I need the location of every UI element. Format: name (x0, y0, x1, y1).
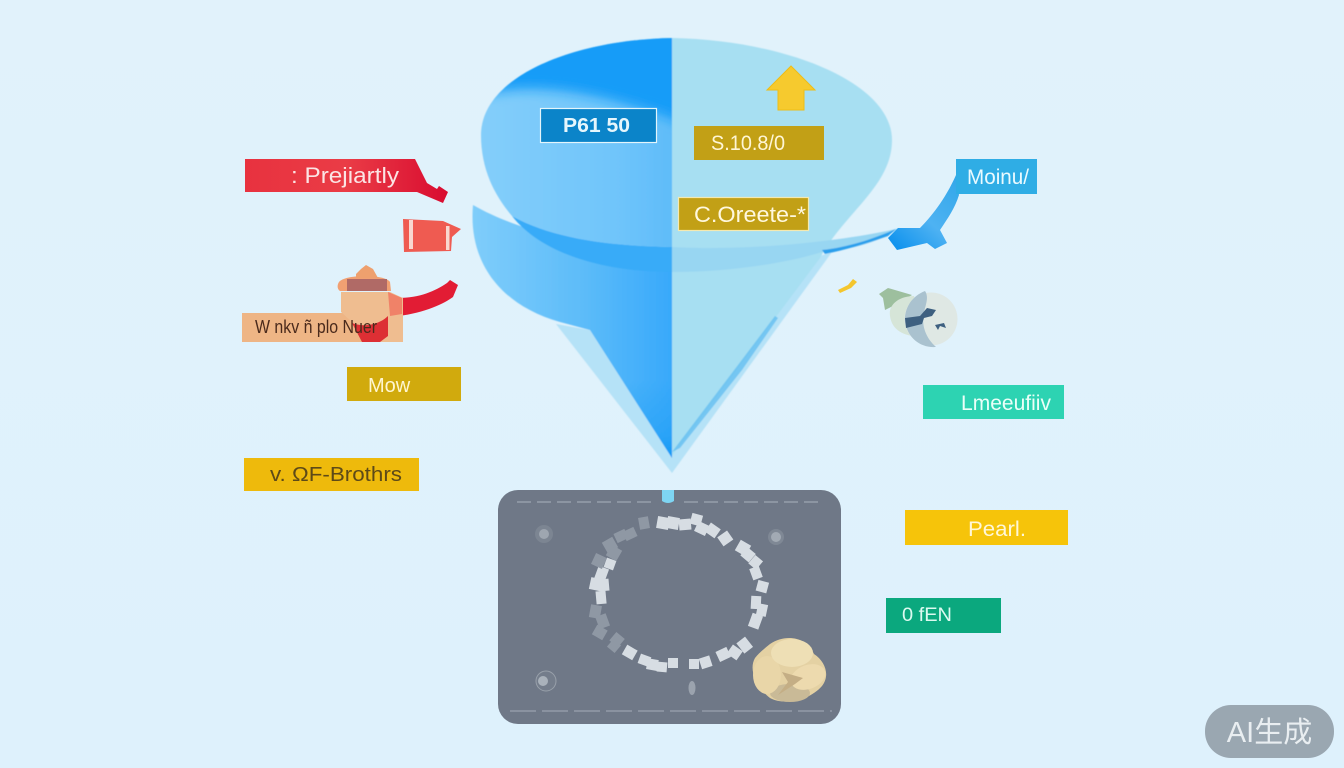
green label: 0 fEN (902, 605, 952, 626)
funnel rim highlight (822, 229, 896, 254)
figure hat (338, 276, 391, 291)
yellow label: Mow (347, 367, 461, 401)
yellow label: Brothrs: v. ΩF-Brothrs (270, 464, 402, 486)
funnel swoosh left (512, 216, 672, 272)
red banner: Prejiartly (245, 159, 448, 203)
icon: up arrow (767, 66, 815, 110)
icon: globe with leaf (879, 288, 958, 347)
screw top left (535, 525, 553, 543)
globe dark side (905, 291, 936, 347)
red arm (398, 280, 458, 316)
device panel (498, 490, 841, 724)
yellow label: Brothrs (244, 458, 419, 491)
leaf (879, 288, 912, 310)
funnel tip left (612, 365, 672, 458)
figure hat top (356, 265, 378, 278)
red flag (403, 219, 461, 252)
label: S.10.8/0 (694, 126, 824, 160)
teal label: Lmeeufiiv (961, 392, 1051, 415)
funnel top bowl left (481, 38, 672, 247)
funnel outer pale edge (556, 252, 832, 473)
ring dim squares (590, 517, 649, 652)
figure scarf (352, 316, 388, 342)
panel body (498, 490, 841, 724)
globe cracks (905, 308, 946, 330)
red banner: Prejiartly: : Prejiartly (291, 163, 399, 188)
badge: AI generated: AI生成 (1227, 716, 1312, 749)
yellow tick (838, 279, 857, 293)
label: C.Oreete: C.Oreete-* (694, 202, 806, 227)
screw top right (768, 529, 784, 545)
figure hat band (347, 279, 387, 291)
back sphere (890, 296, 925, 336)
funnel right half (672, 38, 892, 456)
ribbon connector (888, 175, 959, 250)
screw bottom centre (688, 681, 696, 695)
label: P6150: P61 50 (563, 115, 630, 137)
funnel swoosh right (672, 228, 900, 272)
screw bottom left (536, 671, 556, 691)
blue notch (662, 490, 674, 503)
yellow label: Mow: Mow (368, 375, 411, 397)
teal label (923, 385, 1064, 419)
funnel bowl dark cap (494, 37, 672, 127)
funnel right edge line (672, 316, 778, 452)
yellow label: Pearl: Pearl. (968, 518, 1026, 541)
green label (886, 598, 1001, 633)
blue label: Moinu: Moinu/ (967, 166, 1029, 189)
badge: AI generated (1205, 705, 1334, 758)
yellow label: Pearl (905, 510, 1068, 545)
funnel lower left band (472, 205, 672, 458)
blue label: Moinu (888, 159, 1037, 250)
figure head (341, 292, 403, 342)
figure with hat (338, 265, 403, 342)
funnel (470, 10, 900, 473)
peach label text: W nkv ñ plo Nuer (255, 317, 377, 337)
walnut blob (753, 638, 829, 702)
ring of squares (590, 514, 768, 671)
label: P6150 (540, 108, 656, 142)
label: C.Oreete (678, 198, 808, 230)
figure collar (388, 292, 402, 316)
globe (904, 292, 958, 346)
peach label: Wnkv plo Nuer (242, 313, 403, 342)
label: S.10.8/0: S.10.8/0 (711, 132, 785, 155)
